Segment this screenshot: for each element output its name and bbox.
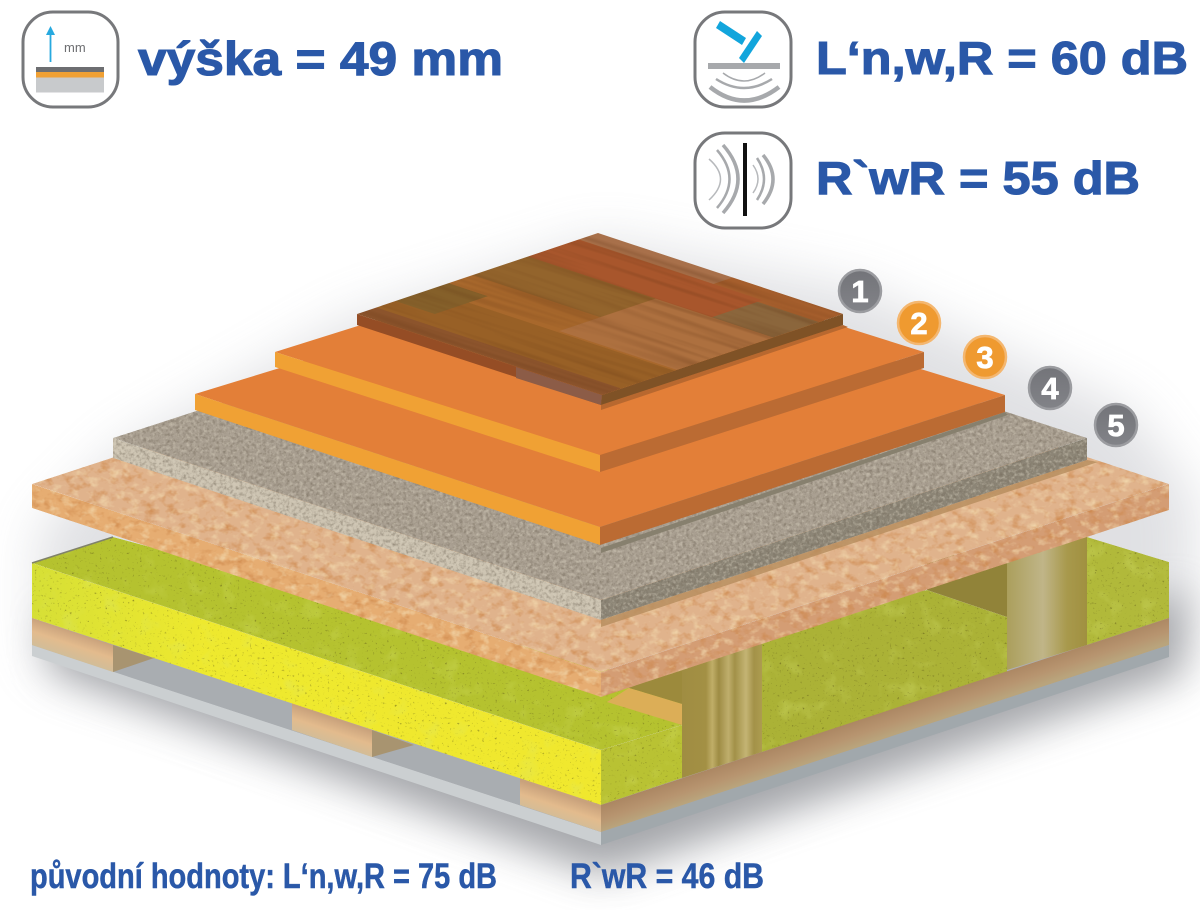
wool right block xyxy=(1087,537,1169,645)
badge 2: 2 xyxy=(910,306,928,341)
wood side faces xyxy=(357,314,848,410)
base structure: ceiling, battens, insulation and joists xyxy=(32,530,1169,845)
impact sound value: L‘n,w,R = 60 dB xyxy=(816,32,1188,84)
concrete, right face xyxy=(601,645,1169,845)
right joist xyxy=(1007,530,1087,670)
original values: airborne: R`wR = 46 dB xyxy=(570,857,764,896)
wool middle block xyxy=(762,590,1007,752)
badge 5: 5 xyxy=(1107,408,1125,443)
left joist xyxy=(682,620,762,778)
joist interior shadow left xyxy=(620,660,682,704)
battens, front faces xyxy=(32,618,601,832)
badge 5 xyxy=(1095,404,1137,446)
layer 2: upper orange board xyxy=(275,250,924,472)
icon: airborne sound xyxy=(695,133,791,228)
wood planks top xyxy=(357,233,843,395)
badge 1: 1 xyxy=(851,274,869,309)
soft drop shadows xyxy=(40,240,1195,875)
badge 4 xyxy=(1029,367,1071,409)
layer 5: chipboard xyxy=(32,297,1169,697)
pale joist end xyxy=(607,688,682,725)
back edge line of wool xyxy=(32,537,113,563)
concrete top seen between battens xyxy=(32,618,601,832)
badge 3 xyxy=(964,336,1006,378)
joist interior at back xyxy=(927,555,1007,617)
wool front block xyxy=(601,725,682,805)
airborne sound value: R`wR = 55 dB xyxy=(816,152,1140,204)
mineral wool, left yellow face xyxy=(32,563,601,805)
layer 4: grey fibre board xyxy=(113,280,1098,627)
original values: impact: původní hodnoty: L‘n,w,R = 75 dB xyxy=(30,857,497,896)
icon: height: mm xyxy=(64,40,86,55)
height value: výška = 49 mm xyxy=(138,32,503,85)
batten side faces xyxy=(113,645,414,757)
numbered badges xyxy=(839,270,1137,446)
mineral wool, olive top face xyxy=(32,537,682,750)
badge 4: 4 xyxy=(1041,371,1059,406)
batten strip, right face xyxy=(601,618,1169,832)
badge 2 xyxy=(898,302,940,344)
concrete layer, left face xyxy=(32,645,601,845)
badge 3: 3 xyxy=(976,340,994,375)
layer 1: wood flooring xyxy=(357,233,848,410)
badge 1 xyxy=(839,270,881,312)
icon: impact sound xyxy=(695,12,791,107)
icon: height xyxy=(23,12,118,107)
layer 3: lower orange board xyxy=(195,270,1008,553)
